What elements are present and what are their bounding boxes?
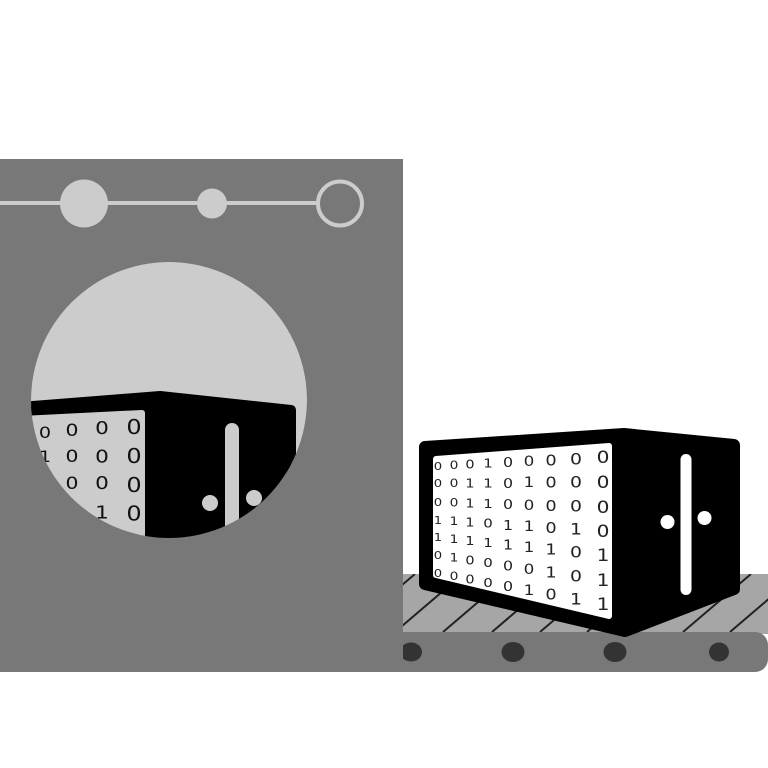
data box on conveyor: [425, 434, 734, 631]
belt surface: [403, 574, 768, 634]
box seen through window: 000: [66, 422, 78, 494]
box seen through window: 0001: [95, 418, 109, 523]
box body: [425, 434, 734, 631]
belt base: [390, 632, 768, 672]
conveyor belt: [403, 574, 768, 672]
binary digits: 0101101: [524, 453, 534, 599]
door dot left: [660, 515, 674, 529]
door slot: [680, 454, 692, 595]
binary digits: 0000111: [597, 449, 609, 615]
binary digits: 0001100: [503, 455, 513, 594]
machine body: [0, 159, 403, 672]
binary digits: 1110100: [483, 457, 493, 591]
box seen through window: [31, 391, 296, 538]
binary digits: [434, 449, 609, 615]
box seen through window: 01: [39, 424, 51, 467]
door dot right: [698, 511, 712, 525]
binary digits: 0001001: [570, 451, 582, 609]
indicator lights: [0, 180, 362, 228]
box seen through window: 0000: [126, 416, 142, 526]
belt wheels: [400, 642, 729, 662]
binary digits: 0001100: [434, 460, 442, 580]
binary screen: [436, 446, 609, 616]
scanner machine: [0, 159, 403, 672]
illustration: data box on conveyor leaving scanner machine: [0, 159, 768, 672]
binary digits: 0111100: [465, 458, 475, 587]
binary digits: 0000110: [545, 452, 557, 603]
binary digits: 0001110: [450, 458, 458, 583]
porthole window: [31, 262, 307, 538]
